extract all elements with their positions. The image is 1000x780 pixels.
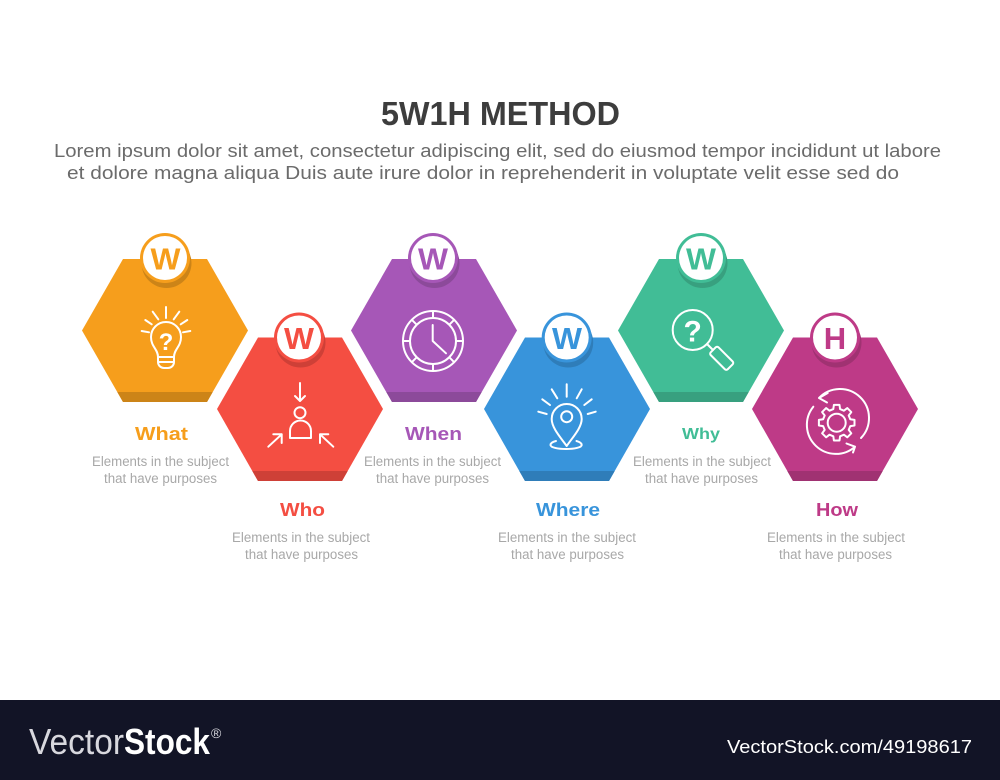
badge: why [676, 233, 728, 288]
icon: magnifier with question mark [673, 310, 734, 371]
subtitle text block: et dolore magna aliqua Duis aute irure dolor in reprehenderit in voluptate velit esse sed do [67, 162, 899, 183]
label: who: Who [280, 500, 325, 520]
description: how [767, 530, 905, 562]
hexagon base: how [787, 471, 883, 481]
icon: light bulb with question mark [142, 307, 190, 368]
icon: clock [403, 311, 463, 371]
icon: light bulb with question mark: ? [159, 329, 173, 356]
description: when: Elements in the subject [364, 454, 501, 469]
panel: who [217, 312, 383, 562]
hexagon: when [351, 259, 517, 402]
hexagon: who [217, 338, 383, 481]
subtitle text block [54, 140, 941, 183]
footer logo: Vector [29, 721, 124, 762]
badge: where: W [552, 321, 583, 356]
description: where: that have purposes [511, 547, 624, 562]
badge: what [140, 233, 192, 288]
description: what: that have purposes [104, 471, 217, 486]
title: 5W1H METHOD [381, 95, 620, 132]
description: why: Elements in the subject [633, 454, 771, 469]
badge: who [274, 312, 326, 368]
icon: person with arrows [268, 383, 333, 447]
footer bar [0, 700, 1000, 780]
description: who: Elements in the subject [232, 530, 370, 545]
icon: location pin [538, 384, 596, 449]
hexagon: how [752, 338, 918, 481]
panel: how [752, 312, 918, 562]
badge: what: W [150, 242, 181, 276]
footer logo: ® [211, 725, 222, 741]
label: when: When [405, 424, 462, 444]
description: when [364, 454, 501, 486]
hexagon: why [618, 259, 784, 402]
description: why: that have purposes [645, 471, 758, 486]
label: how: How [816, 500, 859, 520]
description: where: Elements in the subject [498, 530, 636, 545]
description: when: that have purposes [376, 471, 489, 486]
panel: why [618, 233, 784, 486]
hexagon: where [484, 338, 650, 481]
hexagon base: who [252, 471, 348, 481]
description: who: that have purposes [245, 547, 358, 562]
description: what: Elements in the subject [92, 454, 229, 469]
hexagon base: what [117, 392, 213, 402]
description: how: Elements in the subject [767, 530, 905, 545]
hexagon: what [82, 259, 248, 402]
description: what [92, 454, 229, 486]
label: what: What [135, 424, 188, 444]
panel: when [351, 233, 517, 486]
icon: gear with cycle arrows [807, 389, 869, 454]
description: who [232, 530, 370, 562]
icon: magnifier with question mark: ? [684, 316, 702, 348]
badge: when: W [418, 242, 449, 276]
footer logo [29, 721, 222, 762]
subtitle text block: Lorem ipsum dolor sit amet, consectetur adipiscing elit, sed do eiusmod tempor incididunt ut labore [54, 140, 941, 161]
badge: where [542, 312, 593, 368]
badge: how: H [824, 321, 846, 356]
footer logo: Stock [124, 721, 211, 762]
panel: where [484, 312, 650, 562]
hexagon base: when [386, 392, 482, 402]
badge: why: W [686, 242, 717, 276]
badge: who: W [284, 321, 315, 356]
hexagon base: where [519, 471, 615, 481]
description: where [498, 530, 636, 562]
badge: when [408, 233, 460, 288]
footer image id: VectorStock.com/49198617 [727, 736, 972, 757]
label: where: Where [536, 500, 600, 520]
label: why: Why [682, 426, 720, 443]
hexagon base: why [653, 392, 749, 402]
description: why [633, 454, 771, 486]
description: how: that have purposes [779, 547, 892, 562]
panel: what [82, 233, 248, 486]
badge: how [810, 312, 862, 368]
